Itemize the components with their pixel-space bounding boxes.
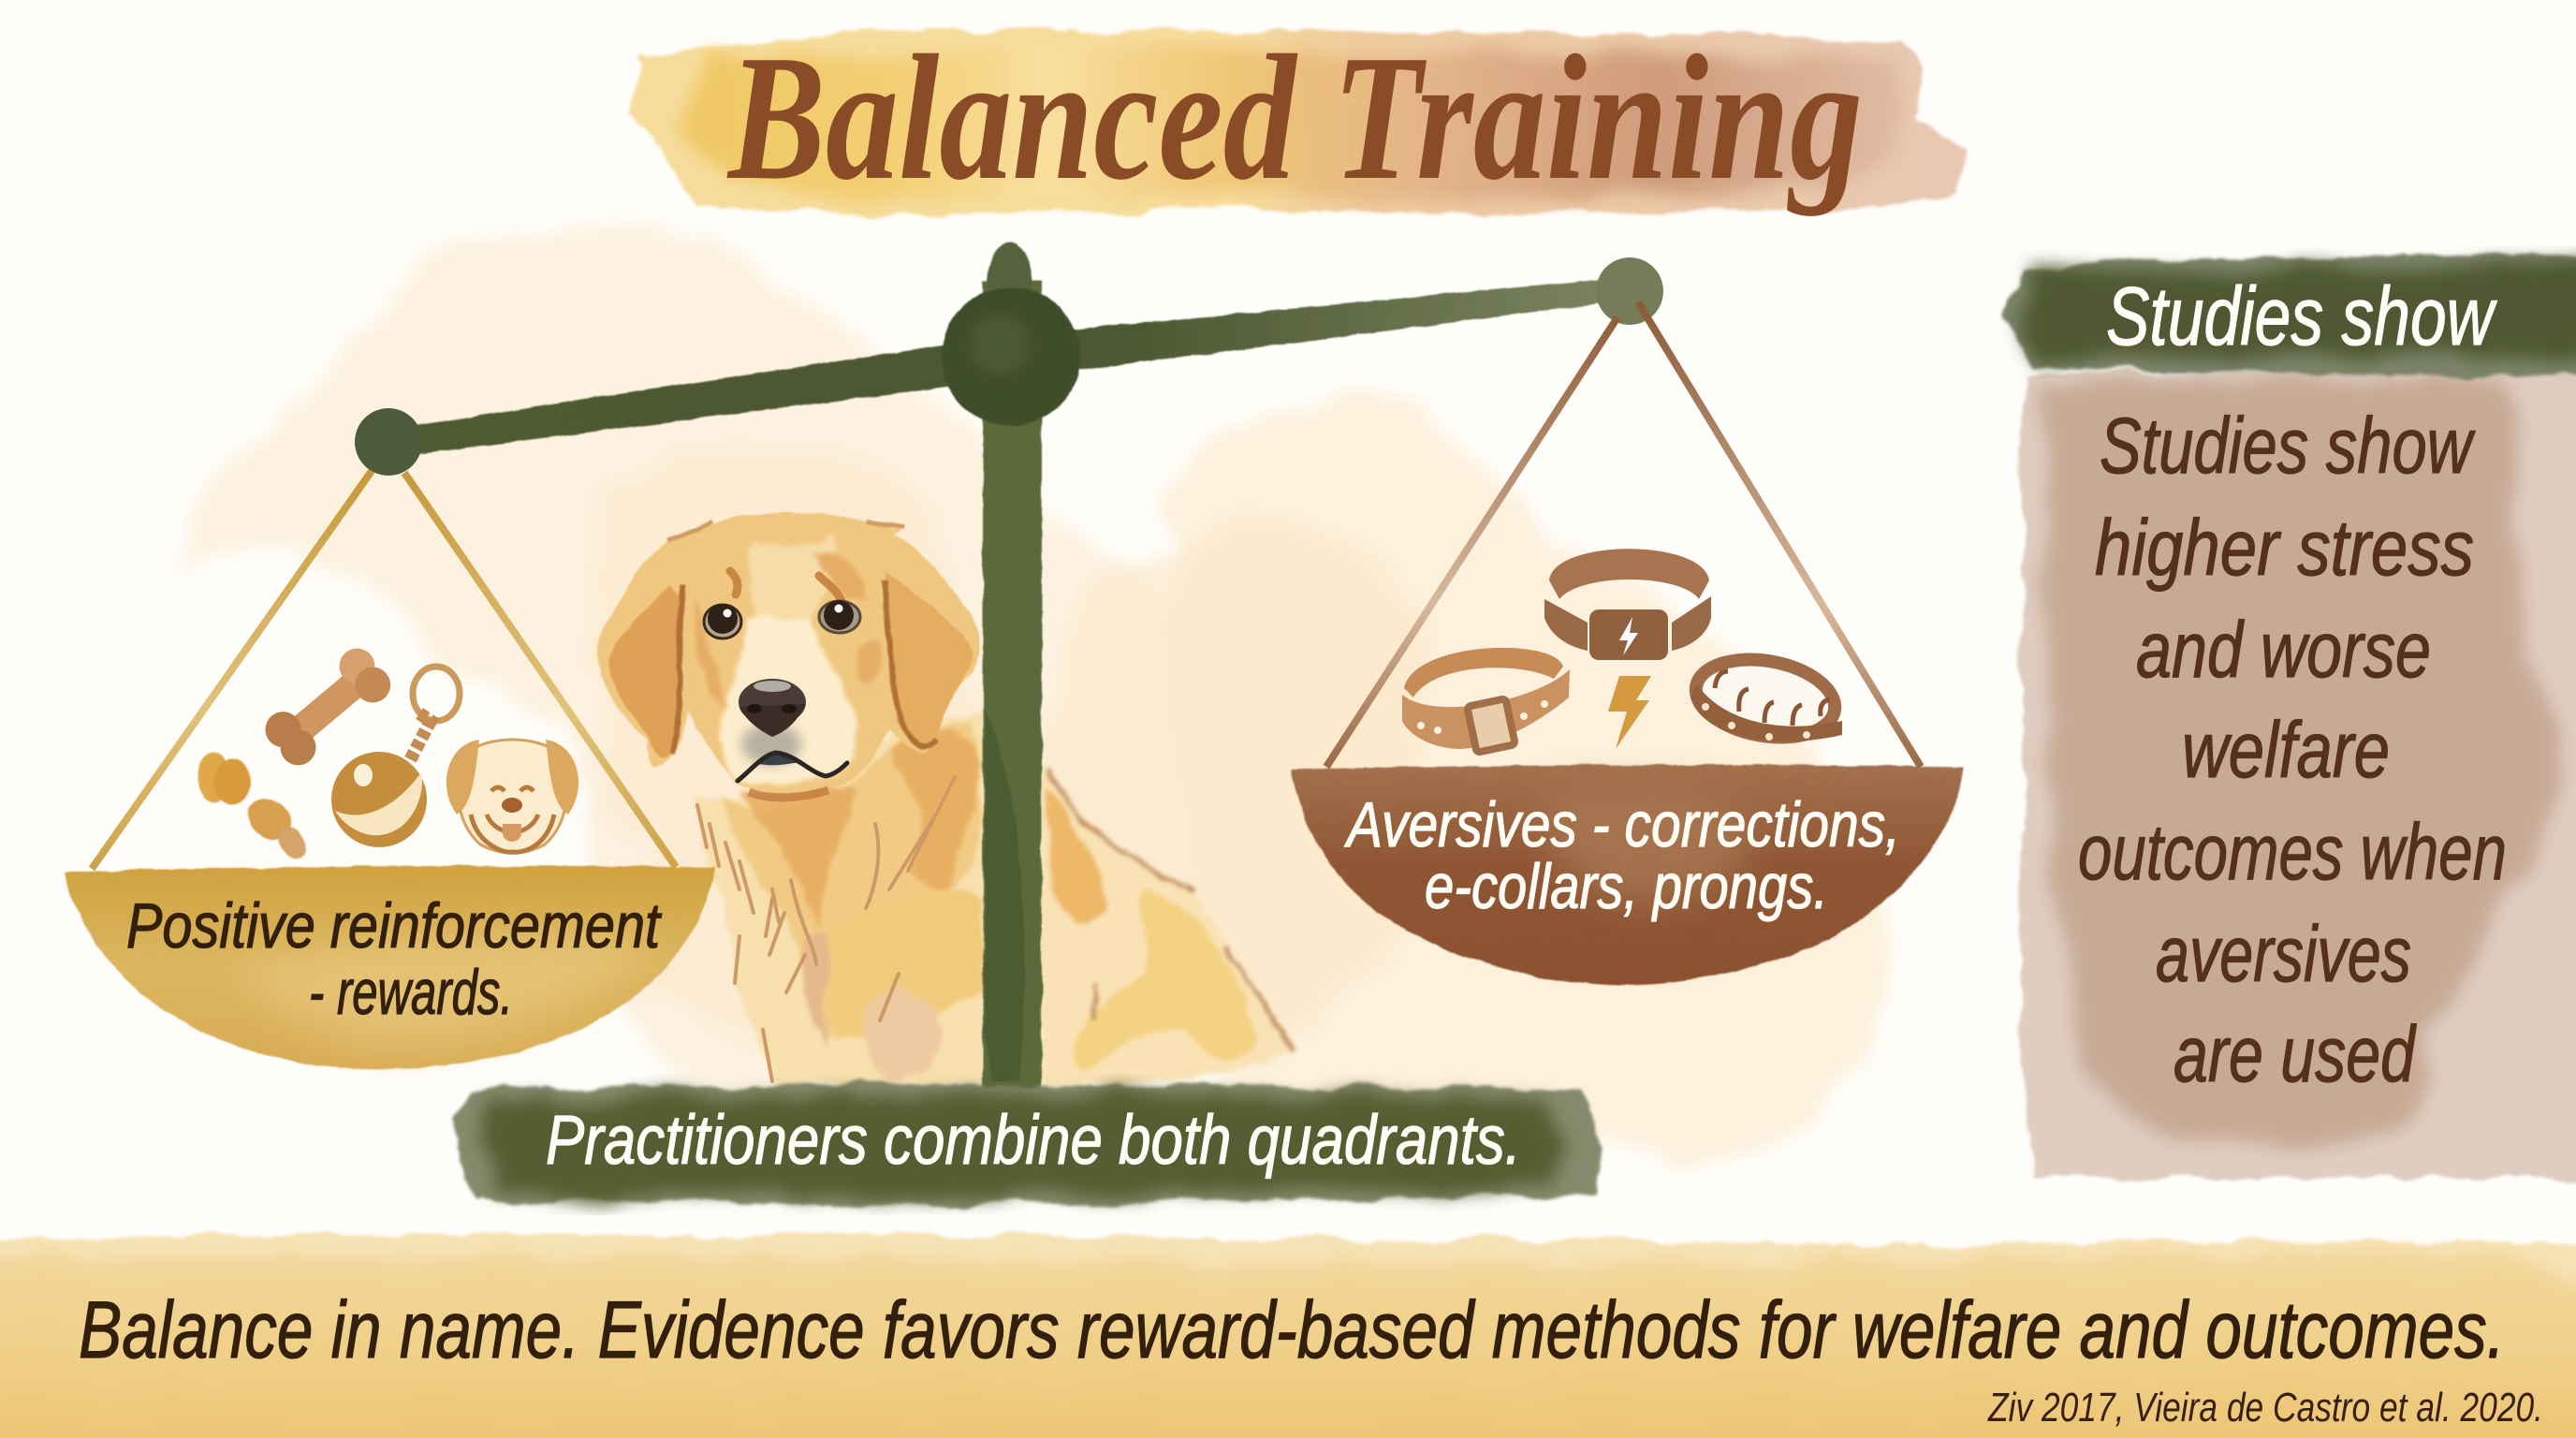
- background watercolor wash: [164, 221, 1891, 1157]
- dog mouth: [738, 753, 847, 798]
- panel header core: [2022, 265, 2576, 360]
- icon: buckle collar: [1402, 648, 1570, 753]
- right pan label: Aversives - corrections,: [1344, 789, 1900, 860]
- reward icons: [198, 641, 578, 863]
- left pan label: Positive reinforcement: [126, 890, 663, 961]
- panel header fringe: [2001, 255, 2576, 378]
- dog nose: [739, 679, 806, 765]
- panel: studies show: [2001, 255, 2576, 1181]
- title text: Balanced Training: [726, 18, 1863, 217]
- scale beam: [389, 277, 1630, 457]
- icon: ball on rope: [331, 667, 460, 847]
- panel body text: and worse: [2136, 606, 2431, 694]
- golden retriever illustration: [597, 513, 1292, 1084]
- panel body text: higher stress: [2095, 504, 2474, 592]
- bottom brush main layer: [0, 1254, 2576, 1438]
- aversive icons: [1402, 549, 1842, 753]
- icon: happy dog face: [446, 740, 578, 853]
- panel body text: Studies show: [2100, 402, 2476, 490]
- panel body text: welfare: [2182, 706, 2390, 794]
- right pan cords: [1326, 302, 1921, 767]
- scale post: [983, 242, 1042, 1091]
- base label: Practitioners combine both quadrants.: [546, 1101, 1521, 1179]
- base brush pale edge: [451, 1084, 1603, 1204]
- pivot hub: [942, 287, 1080, 426]
- left pan: positive reinforcement: [65, 471, 715, 1069]
- right pan bowl: [1291, 765, 1963, 985]
- bottom brush pale layer: [0, 1234, 2576, 1438]
- icon: lightning bolt: [1608, 676, 1651, 749]
- brush stroke saturated layer: [679, 47, 1905, 199]
- panel body text: are used: [2174, 1010, 2417, 1098]
- panel pale layer: [2022, 373, 2576, 1181]
- base banner: [451, 1084, 1603, 1204]
- left pan bowl: [65, 866, 715, 1069]
- icon: e-collar: [1544, 549, 1711, 660]
- base brush dark core: [482, 1094, 1563, 1195]
- left knob: [355, 408, 422, 476]
- dog head silhouette with ears: [597, 513, 979, 793]
- icon: treats: [198, 752, 311, 863]
- right pan label line 2: e-collars, prongs.: [1425, 851, 1828, 922]
- title banner: [629, 18, 1964, 217]
- dog ears: [608, 521, 973, 758]
- right knob: [1596, 257, 1663, 325]
- bottom banner: [0, 1234, 2576, 1438]
- icon: bone: [257, 641, 398, 772]
- dog eyes: [704, 600, 860, 638]
- left pan label line 2: - rewards.: [309, 957, 513, 1028]
- panel darker wash: [2033, 379, 2563, 1147]
- brush stroke pale layer: [629, 30, 1964, 215]
- panel body text: aversives: [2156, 910, 2411, 998]
- left pan cords: [92, 471, 676, 869]
- dog hindquarters behind post: [1041, 768, 1292, 1084]
- panel body text: [2078, 402, 2507, 1098]
- scale: [355, 242, 1663, 1091]
- icon: prong collar: [1690, 650, 1842, 747]
- dog face markings: [695, 534, 885, 785]
- dog chest and fur: [695, 712, 985, 1084]
- right pan: aversives: [1291, 302, 1963, 985]
